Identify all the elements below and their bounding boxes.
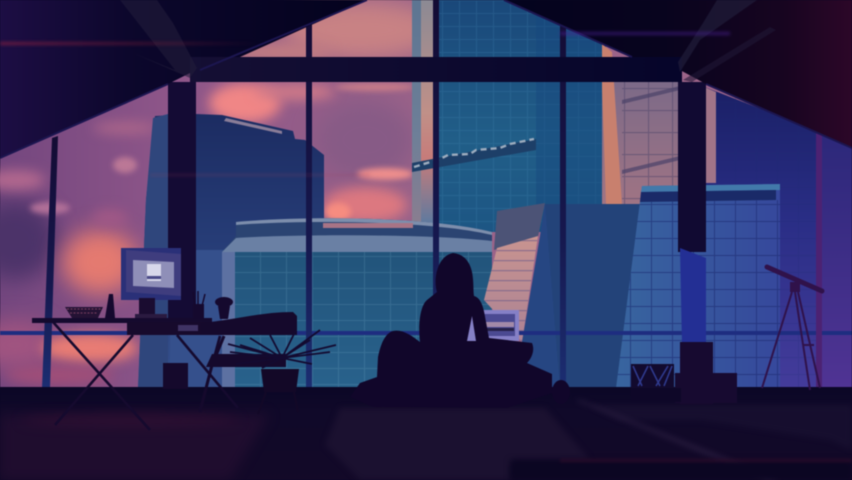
floor xyxy=(0,387,852,480)
roof right xyxy=(504,0,852,148)
chair xyxy=(163,312,297,412)
building: dark right tower xyxy=(702,86,852,388)
building: pink glass tower on right xyxy=(602,44,682,205)
building: left tower xyxy=(138,114,324,388)
desk items: bowl and frame xyxy=(65,294,115,318)
lens flare right xyxy=(560,32,730,35)
building: bright blue glass block xyxy=(616,184,780,388)
monitor xyxy=(121,248,181,318)
potted plant xyxy=(228,330,336,414)
roof rafter right lower xyxy=(683,27,776,82)
laptop xyxy=(467,310,519,341)
roof rafter left xyxy=(120,0,197,78)
woman silhouette on beanbag xyxy=(350,253,570,408)
roof edge trim right xyxy=(504,0,852,148)
roof left xyxy=(0,0,367,158)
ceiling beam xyxy=(190,57,682,82)
building: angled wedge blocks xyxy=(484,203,644,388)
desk with crossed legs xyxy=(32,318,297,430)
telescope on tripod xyxy=(762,267,822,390)
roof rafter right xyxy=(678,0,757,72)
building: central glass tower xyxy=(412,0,606,232)
desk items: pen cup and plant xyxy=(193,291,233,319)
roof edge trim left xyxy=(0,0,367,158)
lens flare left xyxy=(0,42,260,45)
side table and stacked boxes xyxy=(631,342,737,404)
lens flare across tower xyxy=(150,174,370,176)
building: round low block xyxy=(222,218,492,388)
